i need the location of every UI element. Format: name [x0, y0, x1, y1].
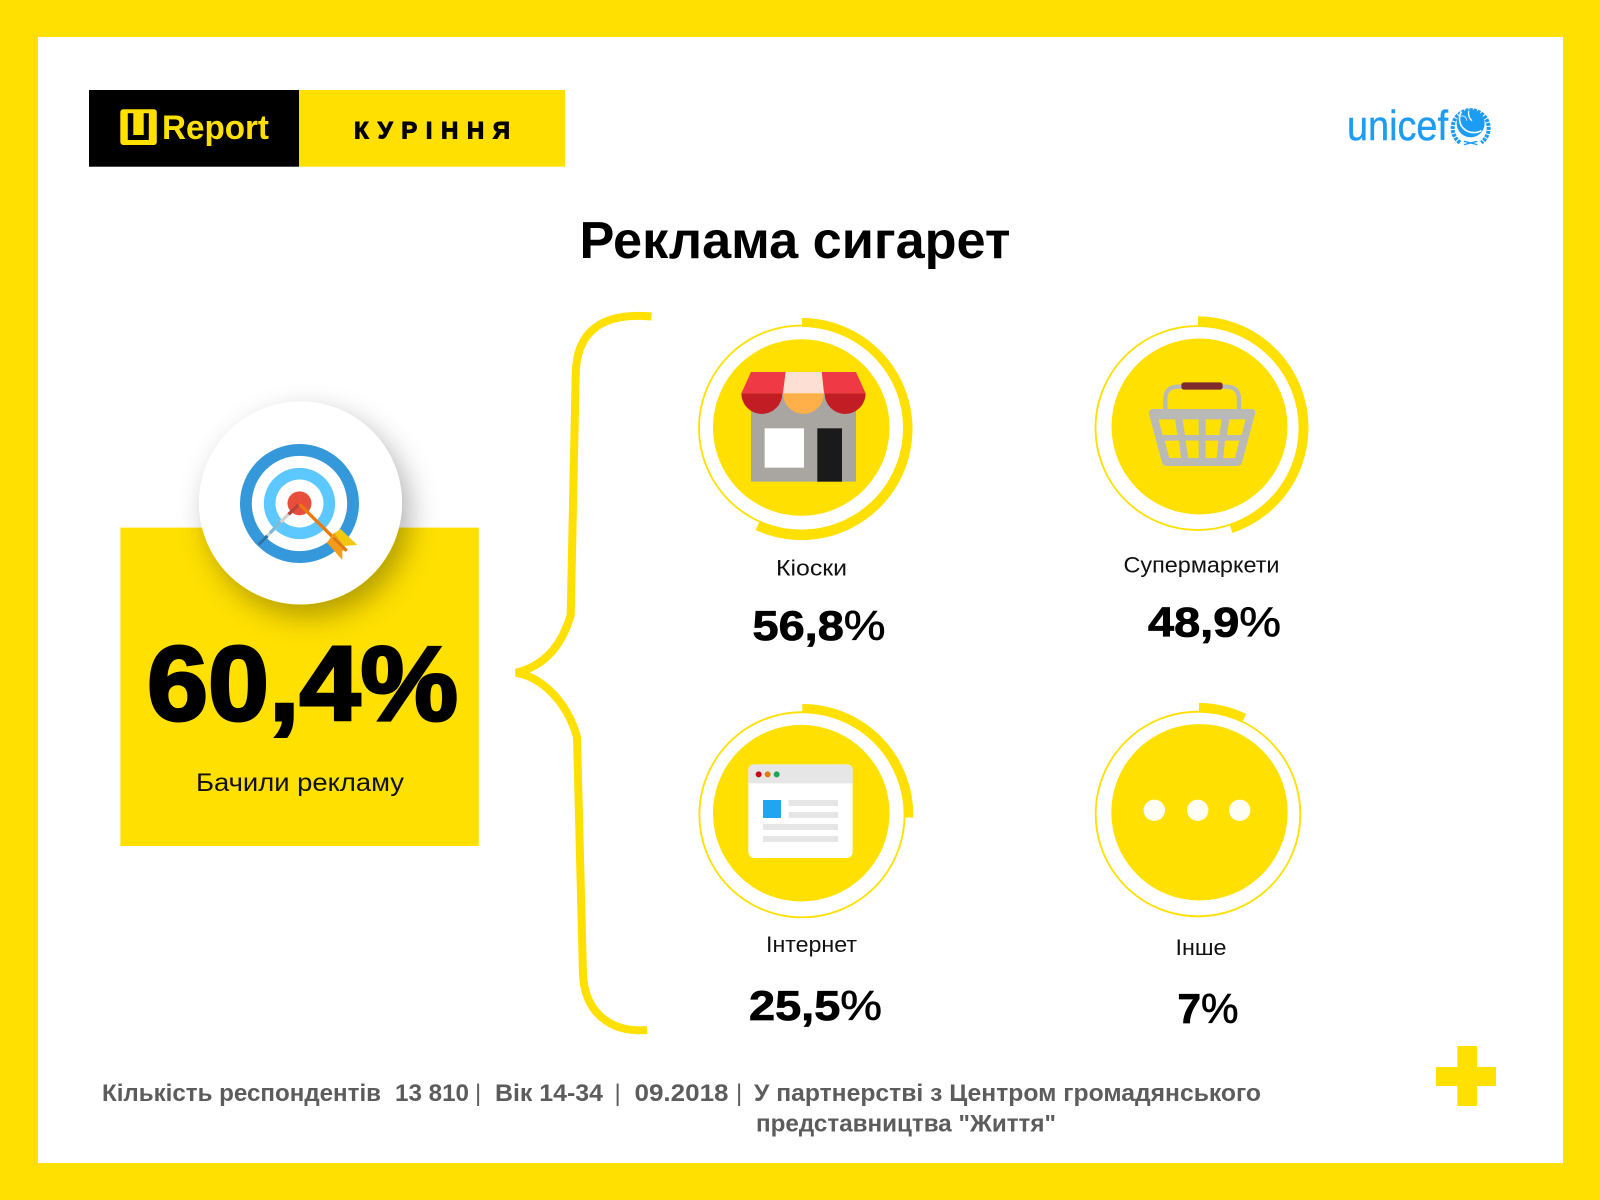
progress ring 56.8% [699, 322, 908, 535]
value: 25,5% [749, 982, 882, 1029]
white badge circle [199, 402, 402, 604]
separator: | [475, 1080, 481, 1107]
curly brace connector [516, 316, 652, 1030]
progress ring 25.5% [699, 708, 909, 917]
progress ring 48.9% [1096, 321, 1304, 530]
topic yellow block [299, 90, 565, 167]
value: 7% [1178, 985, 1238, 1032]
age: Вік 14-34 [495, 1080, 604, 1107]
U-Report black block [89, 90, 299, 167]
separator: | [736, 1080, 742, 1107]
U-Report logo word: Report [162, 109, 269, 147]
icon: target with arrow [240, 444, 359, 563]
UNICEF logo [1347, 102, 1489, 149]
category: other [1096, 707, 1300, 1032]
category: supermarkets [1096, 321, 1304, 646]
label: Кіоски [776, 556, 847, 580]
header banner [89, 90, 565, 167]
icon: three dots [1144, 800, 1250, 821]
value: 48,9% [1148, 598, 1281, 646]
separator: | [614, 1080, 621, 1107]
unicef word: unicef [1347, 102, 1448, 149]
yellow stat box [120, 528, 479, 846]
label: Супермаркети [1124, 552, 1280, 578]
respondents: Кількість респондентів [102, 1080, 381, 1107]
U-Report logo mark [120, 109, 157, 145]
UNICEF emblem [1453, 109, 1489, 145]
category: kiosks [699, 322, 908, 649]
respondents count: 13 810 [395, 1080, 469, 1107]
topic label: КУРІННЯ [354, 117, 510, 144]
yellow disc [1111, 724, 1288, 900]
icon: browser window [748, 764, 853, 858]
partnership line 1: У партнерстві з Центром громадянського [754, 1080, 1261, 1107]
icon: basket [1149, 382, 1255, 466]
main stat panel [120, 402, 479, 846]
label: Інтернет [766, 932, 857, 957]
yellow disc [1112, 338, 1288, 514]
footer text [102, 1080, 1261, 1138]
yellow disc [713, 725, 890, 902]
yellow disc [713, 339, 890, 516]
icon: shop [741, 372, 866, 482]
category: internet [699, 708, 909, 1029]
progress ring 7% [1096, 707, 1300, 916]
date: 09.2018 [634, 1080, 728, 1107]
title: Реклама сигарет [580, 212, 1010, 270]
main caption: Бачили рекламу [196, 769, 405, 797]
main percentage: 60,4% [147, 625, 458, 743]
partnership line 2: представництва "Життя" [756, 1110, 1056, 1138]
label: Інше [1176, 935, 1226, 960]
yellow plus mark [1436, 1046, 1496, 1106]
value: 56,8% [752, 602, 886, 649]
